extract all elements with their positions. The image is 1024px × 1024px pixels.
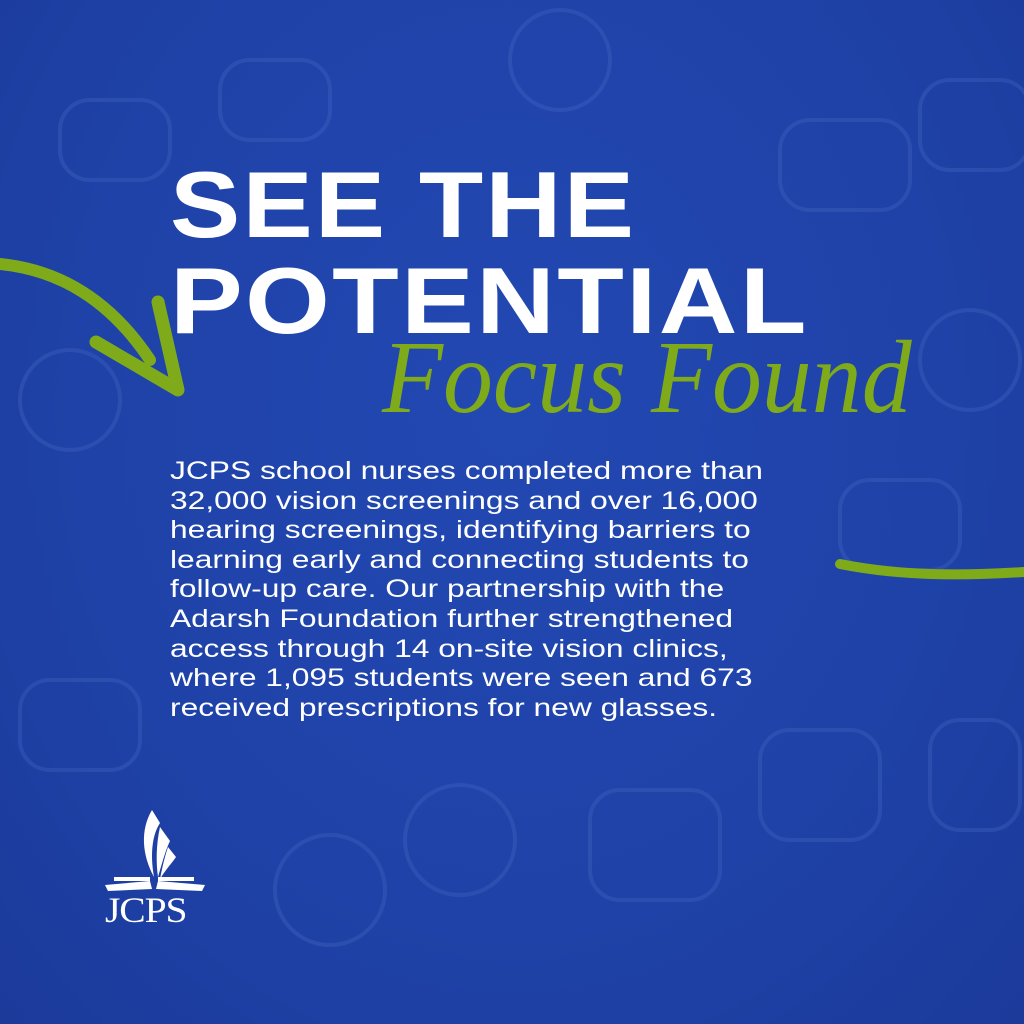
title bbox=[170, 152, 809, 353]
arrow: left green curve bbox=[0, 258, 184, 396]
title: SEE THE bbox=[170, 152, 636, 257]
logo: JCPS bbox=[105, 810, 205, 930]
body text: hearing screenings, identifying barriers to bbox=[170, 516, 751, 544]
body text bbox=[170, 457, 763, 722]
body text: 32,000 vision screenings and over 16,000 bbox=[170, 487, 758, 515]
body text: access through 14 on-site vision clinics, bbox=[170, 635, 728, 663]
script subtitle: Focus Found bbox=[382, 320, 912, 435]
body text: JCPS school nurses completed more than bbox=[170, 457, 763, 485]
title: POTENTIAL bbox=[170, 248, 809, 353]
logo: JCPS: JCPS bbox=[105, 890, 186, 930]
body text: follow-up care. Our partnership with the bbox=[170, 575, 724, 603]
body text: received prescriptions for new glasses. bbox=[170, 694, 717, 722]
body text: learning early and connecting students to bbox=[170, 546, 749, 574]
swoosh right bbox=[835, 559, 1024, 580]
body text: Adarsh Foundation further strengthened bbox=[170, 605, 733, 633]
body text: where 1,095 students were seen and 673 bbox=[170, 664, 752, 692]
